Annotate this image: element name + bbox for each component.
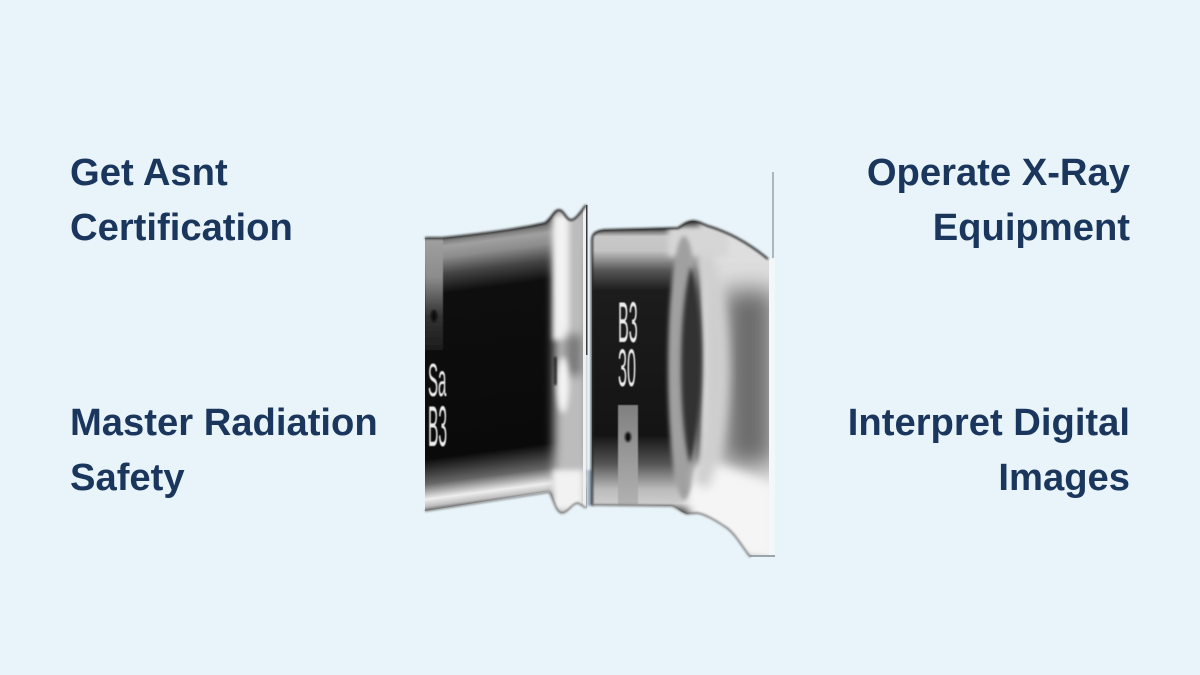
film label: right: 30 [618,339,636,398]
text block: bottom right skill: Interpret Digital [848,401,1130,444]
right pipe section [590,215,780,560]
penetrameter strip [618,405,638,510]
text block: top left skill: Get Asnt [70,151,228,194]
penetrameter strip [425,238,443,350]
thin film edge line [772,172,774,258]
film label: right: B3 [618,290,638,354]
base metal right of weld [700,215,775,560]
text block: bottom left skill: Master Radiation [70,401,378,444]
text block: bottom right skill [848,401,1130,499]
text block: top left skill [70,151,293,249]
text block: bottom left skill: Safety [70,456,185,499]
left pipe section [424,203,588,516]
weld band [554,195,590,525]
weld bead ring [668,226,728,256]
text block: top left skill: Certification [70,206,293,249]
dark lens inside ring [681,266,702,464]
film label: right [618,290,638,398]
film label: left [428,356,447,458]
text block: top right skill: Operate X-Ray [867,151,1130,194]
text block: bottom right skill: Images [998,456,1130,499]
text block: bottom left skill [70,401,378,499]
gap edge [586,205,588,355]
text block: top right skill [867,151,1130,249]
film label: left: Sa [428,356,447,407]
x-ray image of welded pipe [424,172,775,558]
text block: top right skill: Equipment [933,206,1130,249]
film label: left: B3 [428,394,447,458]
